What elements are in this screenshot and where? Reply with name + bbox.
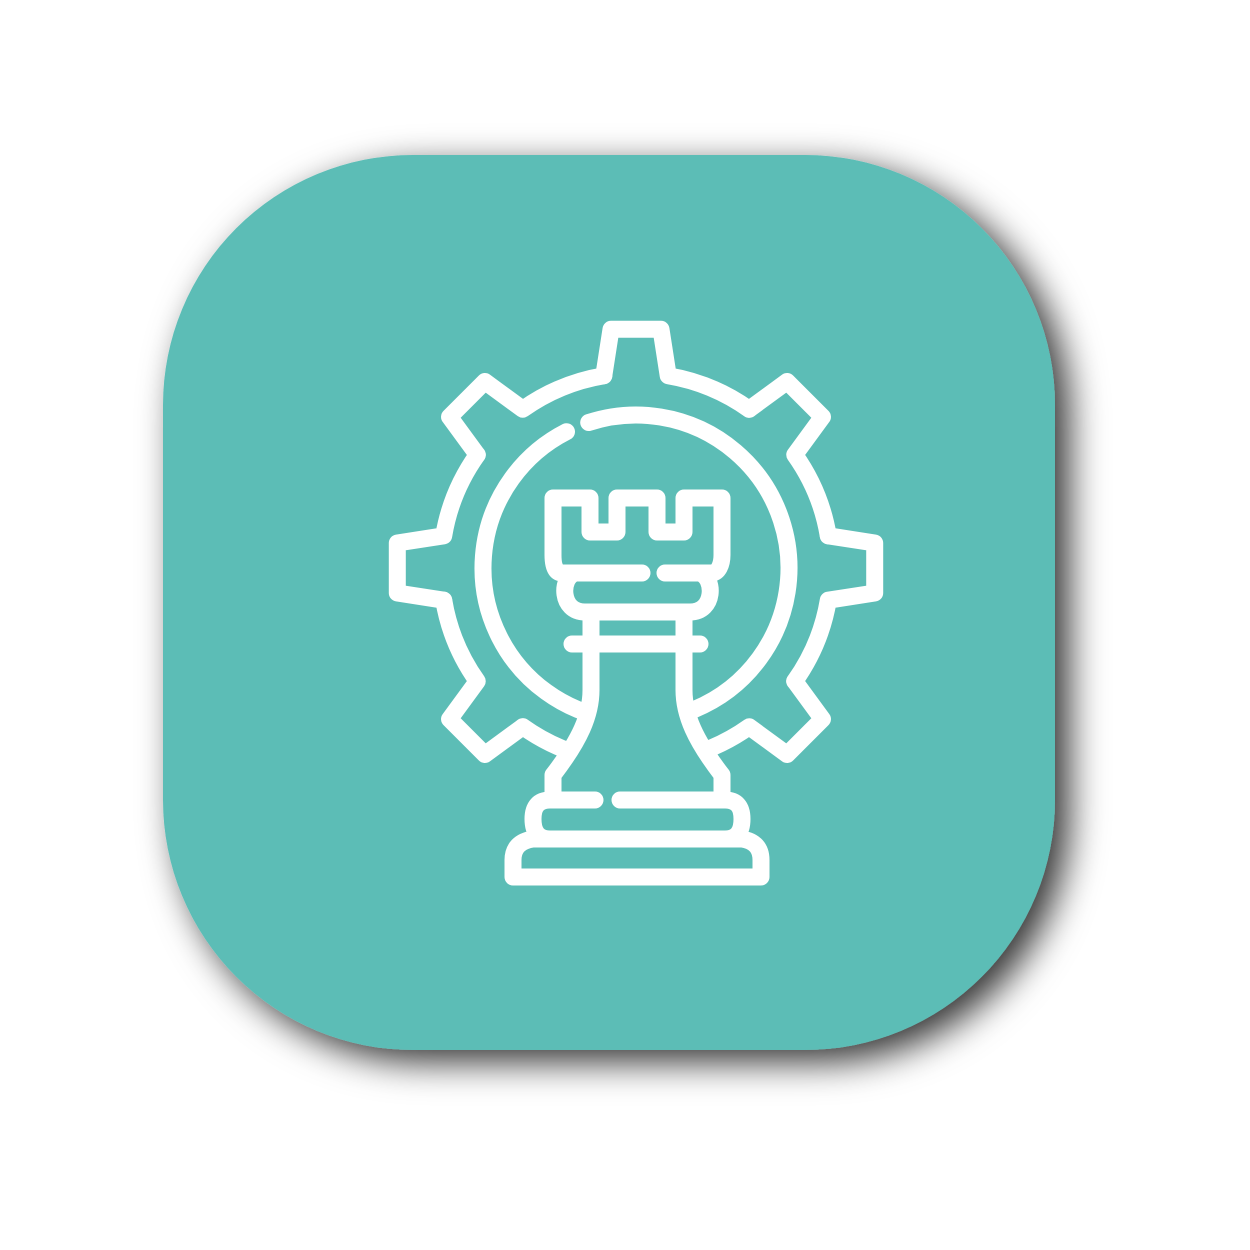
icon: gear with rook xyxy=(387,319,885,877)
icon: gear outline xyxy=(387,319,885,817)
panel: rounded square background xyxy=(163,155,1055,1050)
icon: rook xyxy=(513,498,761,877)
icon: inner circle xyxy=(483,415,789,721)
